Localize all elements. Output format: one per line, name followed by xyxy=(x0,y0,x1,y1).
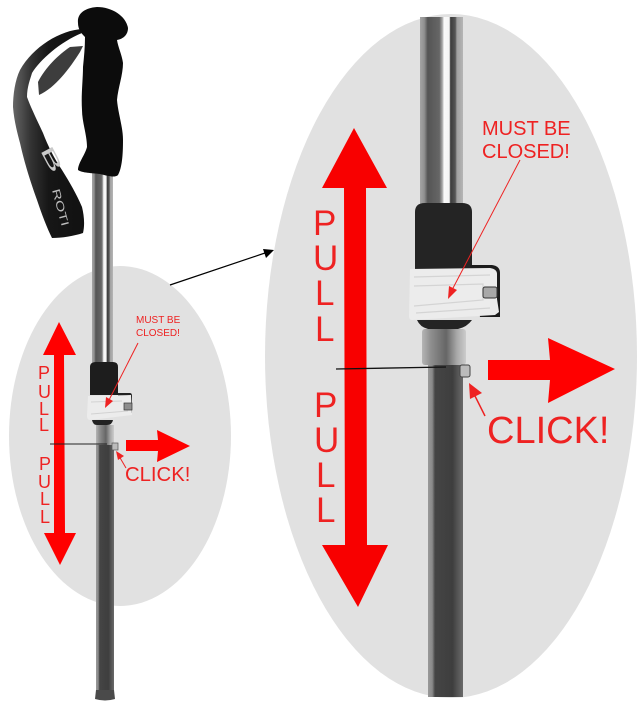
large PULL labels xyxy=(313,204,339,530)
large PULL labels: L xyxy=(315,274,334,313)
large lower shaft xyxy=(428,362,463,697)
large click pointer xyxy=(469,383,485,416)
small click label: CLICK! xyxy=(125,464,190,486)
large PULL labels: U xyxy=(313,239,338,278)
large PULL labels: L xyxy=(316,491,335,530)
large PULL labels: P xyxy=(314,386,337,425)
large must be closed label xyxy=(482,118,571,163)
small PULL labels: P xyxy=(39,454,51,474)
lower shaft xyxy=(96,440,114,690)
clamp shading xyxy=(91,401,128,414)
silver sleeve xyxy=(96,425,114,445)
small detail ellipse xyxy=(9,266,231,606)
large clamp back xyxy=(470,265,500,317)
large black ring xyxy=(417,320,472,329)
small PULL labels: L xyxy=(40,489,50,509)
black collar xyxy=(90,362,118,395)
large PULL labels: L xyxy=(315,310,334,349)
large black collar xyxy=(415,203,472,270)
small must be closed label: CLOSED! xyxy=(136,328,180,339)
large horizontal click arrow xyxy=(488,338,615,403)
small PULL labels: L xyxy=(39,415,49,435)
small vertical pull arrow xyxy=(43,322,76,565)
large PULL labels: U xyxy=(314,421,339,460)
small pole lock mechanism xyxy=(87,362,132,450)
large upper shaft xyxy=(420,17,463,207)
large white clamp xyxy=(409,268,499,320)
small must be closed label xyxy=(136,315,181,339)
large PULL labels: P xyxy=(313,204,336,243)
small PULL labels: U xyxy=(38,382,51,402)
small PULL labels: U xyxy=(38,472,51,492)
pointer arrow between ellipses xyxy=(170,249,274,285)
large click label: CLICK! xyxy=(487,410,609,452)
strap logo: ROTI xyxy=(50,188,71,227)
small black reference line xyxy=(50,443,107,445)
large silver sleeve xyxy=(422,329,466,365)
large must be closed label: MUST BE xyxy=(482,118,571,140)
pole tip xyxy=(95,690,115,700)
white clamp xyxy=(87,395,132,420)
small click pointer xyxy=(116,451,126,468)
strap tab xyxy=(38,46,83,95)
full pole with grip and strap xyxy=(13,7,128,700)
small horizontal click arrow xyxy=(126,430,190,462)
clamp back xyxy=(118,393,132,413)
small PULL labels: L xyxy=(39,399,49,419)
large must be closed label: CLOSED! xyxy=(482,141,570,163)
strap logo xyxy=(36,142,71,227)
large clamp button xyxy=(483,287,497,298)
clamp button xyxy=(124,403,132,410)
large pole detail xyxy=(409,17,500,697)
small must be closed label: MUST BE xyxy=(136,315,181,326)
strap logo: B xyxy=(36,142,67,176)
wrist strap xyxy=(13,29,84,238)
small closed pointer xyxy=(105,343,138,408)
large PULL labels: L xyxy=(316,456,335,495)
large detail ellipse xyxy=(265,14,637,698)
cork grip xyxy=(78,7,128,177)
small PULL labels: L xyxy=(40,507,50,527)
large click button xyxy=(460,365,470,377)
upper shaft xyxy=(92,168,113,364)
large vertical pull arrow xyxy=(322,128,388,607)
large clamp grooves xyxy=(414,275,490,313)
large black reference line xyxy=(336,367,446,369)
small PULL labels: P xyxy=(38,363,50,383)
large closed pointer xyxy=(448,160,520,299)
small PULL labels xyxy=(38,363,51,527)
black ring xyxy=(92,420,113,425)
click button xyxy=(112,443,118,450)
